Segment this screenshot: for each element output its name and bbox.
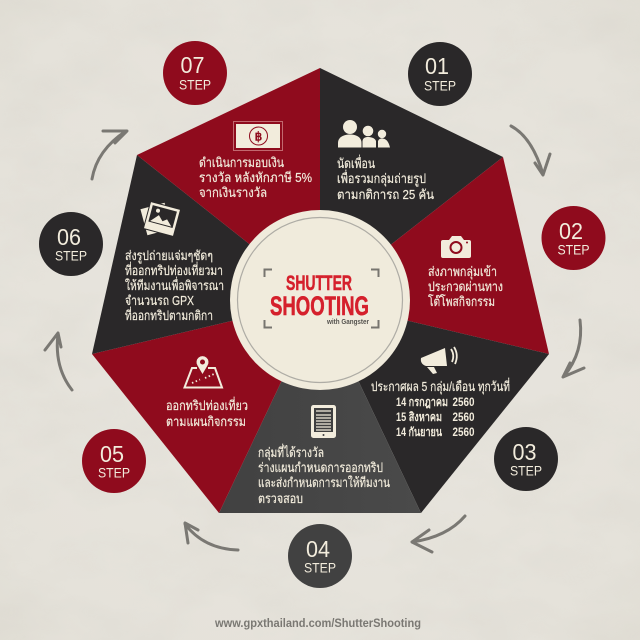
text: step 3 dates: 14 กันยายน [396,425,443,439]
text: step 3 dates: 14 กรกฎาคม [396,395,448,409]
panel 6 content [125,201,224,323]
step 03 badge: STEP [510,462,542,478]
text: step 3 dates: 2560 [452,410,475,424]
text: step 7 [199,155,312,200]
panel 5 content [166,356,248,429]
text: step 1 [337,155,434,202]
step 01 badge [408,42,472,106]
panel 7 segment [137,68,320,300]
arrow: step 2 to 3 [563,320,584,377]
step 06 badge: STEP [55,248,87,264]
icon: camera [441,236,471,258]
text: step 5: ออกทริปท่องเที่ยว [166,397,248,413]
text: step 2: โต๊โพสกิจกรรม [428,294,495,309]
arrow: step 4 to 5 [185,523,238,550]
step 07 badge: 07 [180,52,204,78]
panel 5 segment [92,300,320,513]
text: step 4 [258,444,390,506]
panel 3 content [371,347,510,439]
arrow: step 1 to 2 [511,126,550,175]
step 07 badge: STEP [179,76,211,92]
text: step 5 [166,397,248,429]
text: step 2: ประกวดผ่านทาง [428,279,503,294]
arrow: step 5 to 6 [45,333,72,390]
step 04 badge [288,524,352,588]
subtitle: with Gangster [326,319,369,326]
step 03 badge: 03 [512,439,536,465]
step 03 badge [494,427,558,491]
panel 4 content [258,405,390,506]
text: step 4: กลุ่มที่ได้รางวัล [258,444,324,461]
title line two: SHOOTING [270,291,369,321]
text: step 3 dates: 2560 [452,395,475,409]
text: step 6: จำนวนรถ GPX [125,293,194,308]
step 06 badge [39,212,103,276]
icon: baht banknote: ฿ [255,130,263,144]
text: step 6 [125,248,224,323]
text: step 3 dates: 2560 [452,425,475,439]
step 02 badge [542,206,606,270]
text: step 4: ร่างแผนกำหนดการออกทริป [258,460,383,475]
step 02 badge: 02 [559,218,583,244]
step 01 badge: 01 [425,53,449,79]
text: step 2 [428,264,503,309]
text: step 4: และส่งกำหนดการมาให้ทีมงาน [258,475,390,490]
step 05 badge: STEP [98,464,130,480]
step 05 badge [82,429,146,493]
icon: megaphone [421,347,457,374]
text: step 6: ให้ทีมงานเพื่อพิจารณา [125,277,224,293]
title line one: SHUTTER [286,272,352,295]
arrow: step 6 to 7 [92,131,127,179]
panel 1 segment [320,68,503,300]
text: step 1: ตามกติการถ 25 คัน [337,187,434,202]
step 07 badge [163,41,227,105]
text: step 4: ตรวจสอบ [258,491,303,506]
text: step 3 heading: ประกาศผล 5 กลุ่ม/เดือน ทุกวันที่ [371,378,510,395]
step 02 badge: STEP [558,242,590,258]
icon: map pin [184,356,222,388]
text: step 7: ดำเนินการมอบเงิน [199,155,284,170]
step 04 badge: 04 [306,536,330,562]
center badge [230,210,410,390]
heptagon panels [92,68,549,513]
icon: tablet [311,405,336,438]
panel 1 content [337,120,434,202]
text: step 5: ตามแผนกิจกรรม [166,414,246,429]
icon: photos [140,201,181,237]
panel 7 content [199,122,312,200]
step 05 badge: 05 [100,441,124,467]
panel 4 segment [219,300,421,513]
text: step 6: ที่ออกทริปตามกติกา [125,307,213,323]
step 01 badge: STEP [424,78,456,94]
text: step 2: ส่งภาพกลุ่มเข้า [428,264,497,280]
footer url: www.gpxthailand.com/ShutterShooting [214,616,421,630]
arrow: step 3 to 4 [412,516,465,552]
text: step 6: ส่งรูปถ่ายแจ่มๆชัดๆ [125,248,213,264]
text: step 1: เพื่อรวมกลุ่มถ่ายรูป [337,170,426,187]
text: step 6: ที่ออกทริปท่องเที่ยวมา [125,262,223,278]
panel 6 segment [92,155,320,354]
icon: people [338,120,390,148]
text: step 3 dates: 15 สิงหาคม [396,410,442,424]
text: step 7: รางวัล หลังหักภาษี 5% [199,170,312,185]
step 06 badge: 06 [57,224,81,250]
text: step 1: นัดเพื่อน [337,155,375,171]
step 04 badge: STEP [304,560,336,576]
text: step 7: จากเงินรางวัล [199,185,267,200]
panel 2 segment [320,157,549,354]
panel 2 content [428,236,503,309]
panel 3 segment [320,300,549,513]
viewfinder brackets [264,270,378,328]
text: step 3 dates [396,395,475,439]
